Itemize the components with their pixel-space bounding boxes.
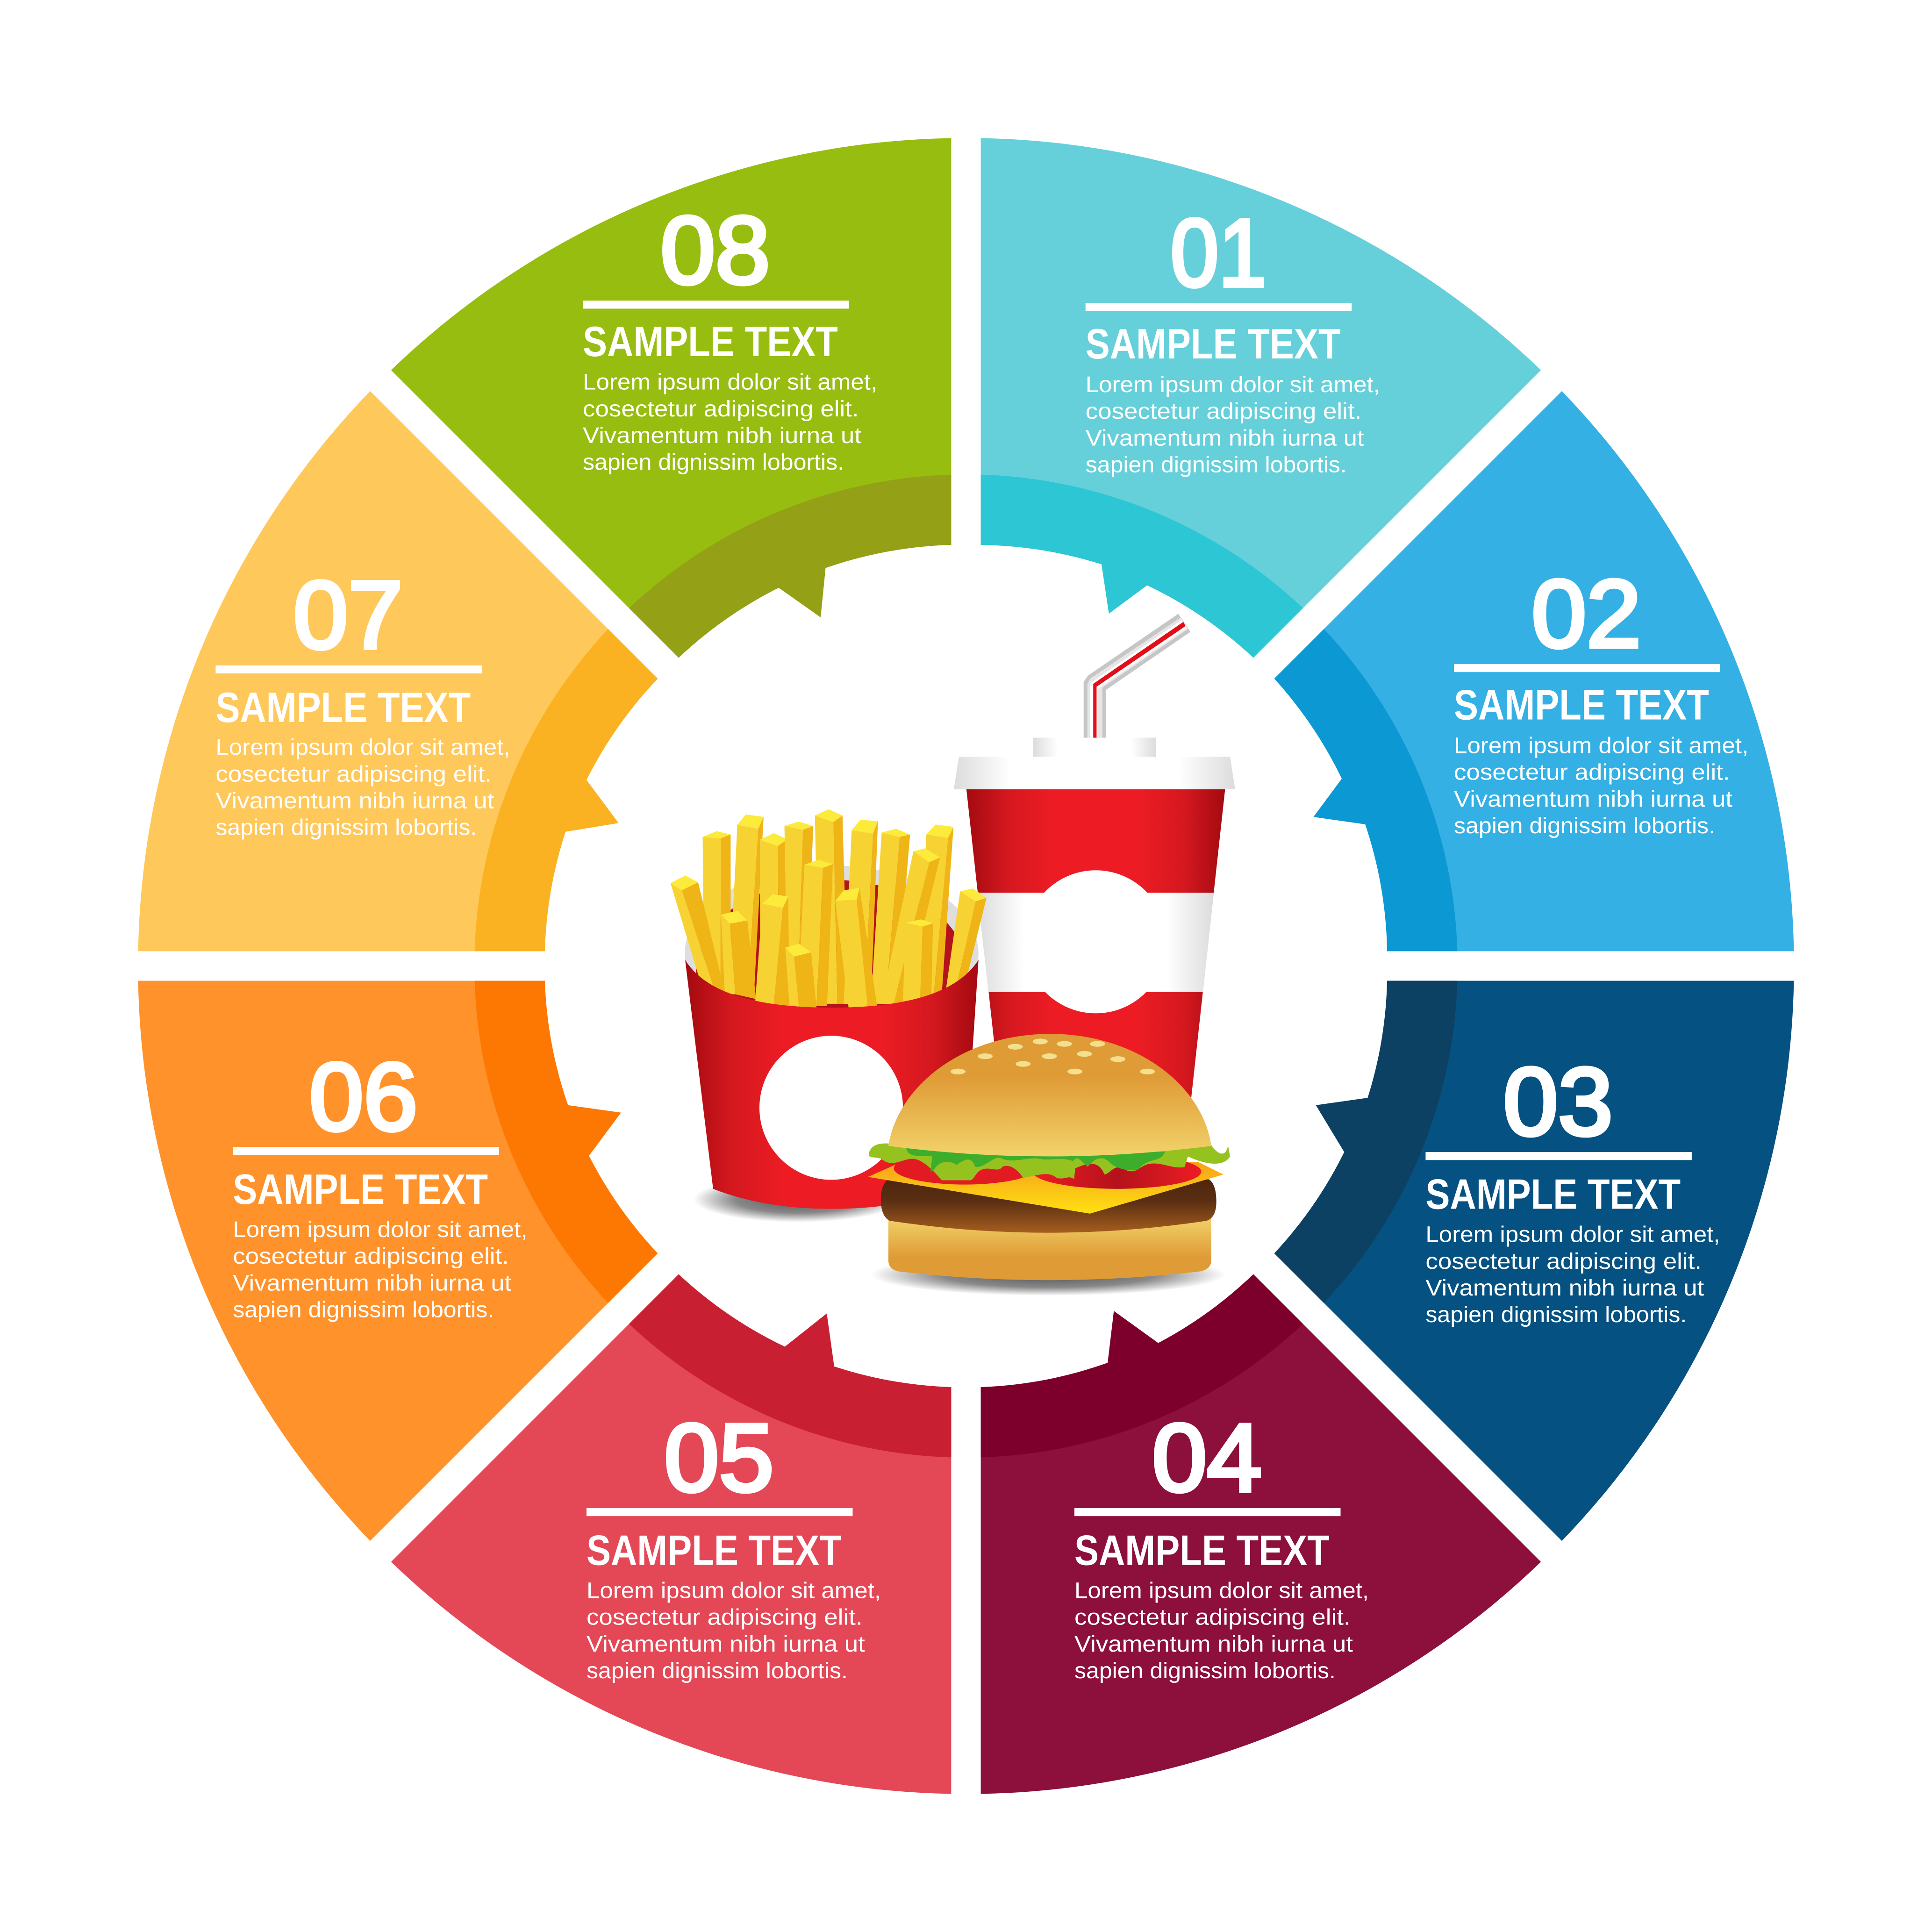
segment 08 inner band — [629, 475, 951, 658]
straw — [1084, 614, 1190, 739]
body 04: cosectetur adipiscing elit. — [1074, 1605, 1351, 1630]
body 08: Lorem ipsum dolor sit amet, — [583, 370, 877, 395]
body 06: cosectetur adipiscing elit. — [233, 1244, 509, 1269]
body 07: cosectetur adipiscing elit. — [215, 762, 492, 787]
body 08: Vivamentum nibh iurna ut — [583, 423, 861, 448]
segment 04 shape — [981, 1274, 1541, 1794]
body 06 — [233, 1217, 527, 1322]
cup body — [966, 789, 1225, 1109]
body 03: sapien dignissim lobortis. — [1425, 1302, 1687, 1327]
body 01: sapien dignissim lobortis. — [1086, 452, 1347, 477]
body 03: Lorem ipsum dolor sit amet, — [1425, 1223, 1720, 1247]
body 06: Vivamentum nibh iurna ut — [233, 1271, 511, 1295]
body 03 — [1425, 1223, 1720, 1327]
segment 05 inner band — [629, 1274, 951, 1457]
heading 06: SAMPLE TEXT — [233, 1166, 488, 1213]
cup lid — [954, 757, 1235, 789]
icon: drink cup — [954, 614, 1235, 1109]
icon: burger — [868, 1034, 1230, 1295]
segment 05 shape — [391, 1274, 951, 1794]
segment 04 text — [1074, 1404, 1369, 1683]
segment 07 shape — [138, 391, 658, 951]
burger shadow — [871, 1254, 1225, 1295]
panel: segment 05 — [391, 1274, 951, 1794]
segment 03 inner band — [1274, 981, 1457, 1303]
divider 07 — [215, 665, 482, 673]
number 07: 07 — [293, 561, 403, 669]
segment 02 shape — [1274, 391, 1794, 951]
divider 02 — [1454, 664, 1720, 672]
body 04: Lorem ipsum dolor sit amet, — [1074, 1579, 1369, 1603]
icon: fries box — [671, 809, 987, 1222]
panel: segment 04 — [981, 1274, 1541, 1794]
fries — [671, 809, 987, 1009]
divider 08 — [583, 301, 849, 308]
body 05: sapien dignissim lobortis. — [587, 1659, 848, 1683]
body 08: sapien dignissim lobortis. — [583, 450, 844, 475]
number 04: 04 — [1152, 1404, 1262, 1511]
body 01: Vivamentum nibh iurna ut — [1086, 426, 1364, 451]
cup lid top — [1033, 738, 1156, 757]
top bun — [888, 1034, 1211, 1156]
segment 06 text — [233, 1043, 527, 1322]
heading 04: SAMPLE TEXT — [1074, 1527, 1330, 1574]
body 08 — [583, 370, 877, 475]
body 05: cosectetur adipiscing elit. — [587, 1605, 863, 1630]
bottom bun — [888, 1216, 1211, 1280]
lettuce — [869, 1144, 1230, 1180]
body 04 — [1074, 1579, 1369, 1683]
segment 06 inner band — [475, 981, 658, 1303]
divider 04 — [1074, 1508, 1340, 1516]
body 01 — [1086, 372, 1380, 477]
segment 02 text — [1454, 560, 1748, 838]
body 01: cosectetur adipiscing elit. — [1086, 399, 1361, 424]
segment 01 text — [1086, 199, 1380, 477]
body 06: Lorem ipsum dolor sit amet, — [233, 1217, 527, 1242]
fries box back — [685, 866, 979, 1042]
body 02: sapien dignissim lobortis. — [1454, 814, 1715, 838]
number 05: 05 — [664, 1404, 774, 1511]
cup white band — [977, 893, 1214, 992]
body 02: cosectetur adipiscing elit. — [1454, 760, 1730, 785]
number 02: 02 — [1531, 560, 1641, 667]
panel: segment 06 — [138, 981, 658, 1541]
body 08: cosectetur adipiscing elit. — [583, 397, 859, 422]
body 02: Lorem ipsum dolor sit amet, — [1454, 733, 1748, 758]
fries box inner — [696, 880, 967, 1061]
body 07 — [215, 735, 510, 840]
body 07: Vivamentum nibh iurna ut — [215, 789, 494, 814]
heading 02: SAMPLE TEXT — [1454, 682, 1709, 729]
divider 03 — [1425, 1152, 1692, 1160]
segment 01 shape — [981, 138, 1541, 658]
panel: segment 01 — [981, 138, 1541, 658]
panel: segment 03 — [1274, 981, 1794, 1541]
body 02: Vivamentum nibh iurna ut — [1454, 787, 1732, 812]
segment 08 text — [583, 196, 877, 475]
fries box front — [685, 960, 979, 1209]
divider 01 — [1086, 303, 1352, 311]
segment 01 inner band — [981, 475, 1303, 658]
heading 01: SAMPLE TEXT — [1086, 321, 1340, 368]
body 05: Vivamentum nibh iurna ut — [587, 1632, 865, 1657]
fries box label circle — [759, 1036, 903, 1180]
body 01: Lorem ipsum dolor sit amet, — [1086, 372, 1380, 397]
body 07: Lorem ipsum dolor sit amet, — [215, 735, 510, 760]
heading 03: SAMPLE TEXT — [1425, 1171, 1681, 1218]
panel: segment 08 — [391, 138, 951, 658]
divider 06 — [233, 1147, 499, 1155]
cheese — [868, 1162, 1224, 1214]
number 03: 03 — [1503, 1048, 1613, 1155]
body 04: Vivamentum nibh iurna ut — [1074, 1632, 1353, 1657]
body 03: cosectetur adipiscing elit. — [1425, 1249, 1702, 1274]
panel: segment 07 — [138, 391, 658, 951]
number 01: 01 — [1171, 199, 1267, 307]
segment 08 shape — [391, 138, 951, 658]
tomato slices — [894, 1152, 1202, 1189]
divider 05 — [587, 1508, 852, 1516]
number 08: 08 — [660, 196, 770, 304]
number 06: 06 — [309, 1043, 418, 1151]
segment 07 text — [215, 561, 510, 840]
body 03: Vivamentum nibh iurna ut — [1425, 1276, 1704, 1301]
body 06: sapien dignissim lobortis. — [233, 1297, 494, 1322]
segment 04 inner band — [981, 1274, 1303, 1457]
segment 02 inner band — [1274, 629, 1457, 951]
cup label circle — [1025, 870, 1166, 1013]
heading 08: SAMPLE TEXT — [583, 318, 838, 365]
patty — [881, 1179, 1216, 1233]
body 05 — [587, 1579, 881, 1683]
body 04: sapien dignissim lobortis. — [1074, 1659, 1336, 1683]
segment 05 text — [587, 1404, 881, 1683]
fries box shadow — [694, 1176, 902, 1222]
body 05: Lorem ipsum dolor sit amet, — [587, 1579, 881, 1603]
heading 07: SAMPLE TEXT — [215, 684, 471, 731]
body 02 — [1454, 733, 1748, 838]
segment 03 text — [1425, 1048, 1720, 1327]
heading 05: SAMPLE TEXT — [587, 1527, 842, 1574]
panel: segment 02 — [1274, 391, 1794, 951]
body 07: sapien dignissim lobortis. — [215, 815, 477, 840]
segment 03 shape — [1274, 981, 1794, 1541]
sesame seeds — [951, 1038, 1155, 1074]
segment 06 shape — [138, 981, 658, 1541]
segment 07 inner band — [475, 629, 658, 951]
illustration: fast food meal — [671, 614, 1235, 1295]
